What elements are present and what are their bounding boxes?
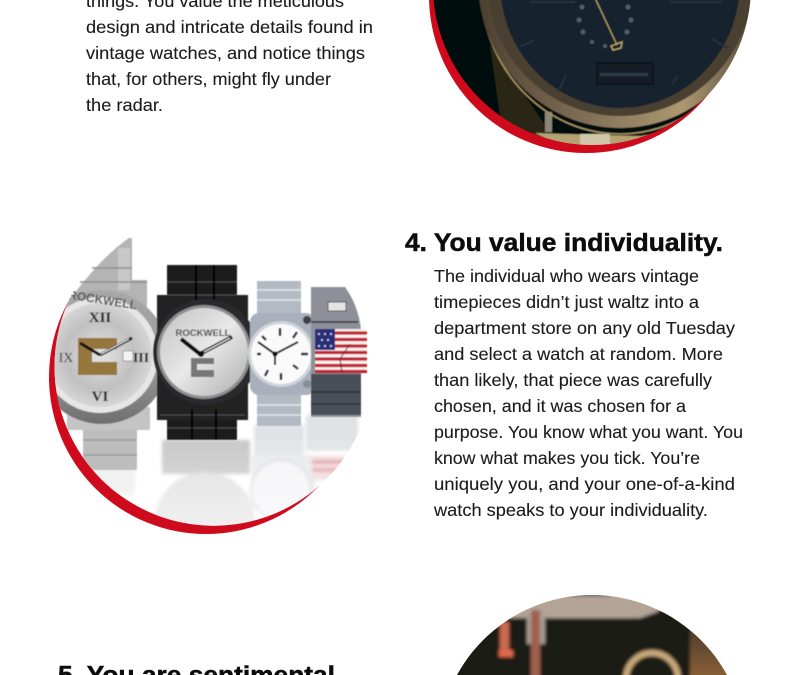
photo: gold watch with red crescent <box>429 0 762 153</box>
text block: point 3 body text <box>86 0 373 115</box>
watch: square silver <box>248 281 315 426</box>
text block: point 4 body text: purpose. You know what you want. You <box>434 422 743 442</box>
text block: point 3 body text: vintage watches, and notice things <box>86 43 365 63</box>
text block: point 3 body text: that, for others, might fly under <box>86 69 331 89</box>
text block: point 4 body text: The individual who wears vintage <box>434 266 699 286</box>
watch: steel with roman numerals: VI <box>92 389 108 405</box>
watch: steel with roman numerals: XII <box>89 310 111 326</box>
photo: sentimental watch close-up <box>457 595 727 675</box>
text block: point 4 body text: chosen, and it was chosen for a <box>434 396 686 416</box>
reflection: watches on glossy surface <box>92 414 359 526</box>
text block: point 4 body text: timepieces didn’t just waltz into a <box>434 292 699 312</box>
text block: point 3 body text: design and intricate details found in <box>86 17 373 37</box>
text block: point 4 body text: know what makes you tick. You’re <box>434 448 700 468</box>
text block: point 3 body text: the radar. <box>86 95 163 115</box>
text block: point 4 body text <box>433 266 743 520</box>
watch: steel with roman numerals: III <box>133 351 149 366</box>
text block: point 4 body text: than likely, that piece was carefully <box>434 370 712 390</box>
text block: point 4 body text: uniquely you, and your one-of-a-kind <box>434 474 735 494</box>
watch: black steel <box>153 265 259 440</box>
watch: American flag dial <box>311 287 367 417</box>
watch: black steel: ROCKWELL <box>176 328 231 339</box>
text block: point 4 body text: watch speaks to your individuality. <box>433 500 708 520</box>
photo: row of Rockwell watches with red crescent <box>49 238 368 534</box>
heading: point 4: 4. You value individuality. <box>405 230 723 257</box>
watch: steel with roman numerals <box>54 238 158 470</box>
text block: point 4 body text: and select a watch at random. More <box>434 344 723 364</box>
watch: steel with roman numerals: ROCKWELL <box>67 288 138 312</box>
watch: steel with roman numerals: IX <box>59 351 73 366</box>
text block: point 4 body text: department store on any old Tuesday <box>434 318 735 338</box>
